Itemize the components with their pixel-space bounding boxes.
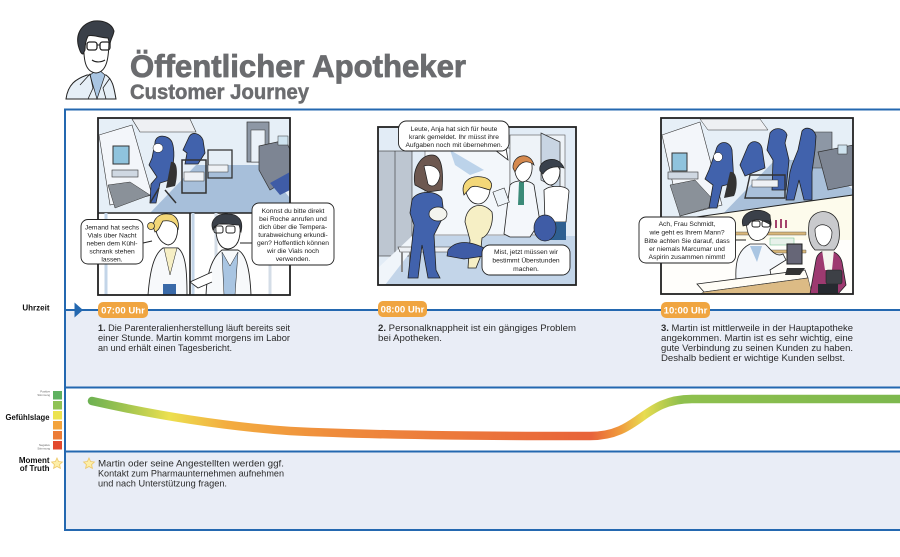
comic panel 2 (378, 121, 576, 285)
panel: journey frame (65, 110, 900, 530)
moment of truth label: of Truth (20, 464, 50, 473)
text block: step 2: 2. Personalknappheit ist ein gängiges Problem (378, 323, 574, 334)
speech bubble: bestimmt Überstunden (492, 256, 560, 264)
time badge 07:00 (98, 302, 148, 318)
speech bubble: Aspirin zusammen nimmt! (649, 254, 726, 261)
speech bubble (398, 121, 509, 160)
speech bubble: er niemals Marcumar und (649, 246, 725, 253)
speech bubble: Ach, Frau Schmidt, (659, 221, 716, 228)
speech bubble: krank gemeldet. Ihr müsst ihre (409, 134, 499, 141)
speech bubble: neben dem Kühl- (87, 240, 137, 248)
speech bubble: Mist, jetzt müssen wir (494, 249, 559, 256)
moment of truth label: Moment (19, 456, 50, 465)
speech bubble: Leute, Anja hat sich für heute (411, 126, 498, 133)
comic panel 1 (81, 118, 334, 295)
speech bubble (240, 203, 334, 265)
speech bubble: Konnst du bitte direkt (262, 208, 325, 215)
speech bubble: lassen. (101, 256, 123, 264)
text block: step 3: 3. Martin ist mittlerweile in der Hauptapotheke (661, 323, 854, 334)
title: Öffentlicher Apotheker (130, 48, 466, 84)
timeline label: Uhrzeit (22, 304, 50, 312)
speech bubble: turabweichung erkundi- (258, 232, 328, 239)
speech bubble: schrank stehen (89, 248, 135, 256)
comic panel 3 (639, 118, 853, 294)
subtitle: Customer Journey (130, 81, 309, 104)
arrow: timeline start (74, 302, 83, 318)
legend: mood scale: Negative (39, 443, 50, 447)
line chart: mood curve (92, 399, 900, 436)
legend: mood scale: Positive (40, 390, 50, 394)
speech bubble (81, 220, 152, 264)
speech bubble (639, 217, 746, 263)
text block: moment of truth: und nach Unterstützung fragen. (98, 478, 227, 490)
time badge 10:00 (661, 302, 710, 318)
legend: mood scale: Stimmung (37, 393, 50, 397)
speech bubble: Jemand hat sechs (85, 224, 140, 232)
text block: moment of truth: Martin oder seine Angestellten werden ggf. (98, 458, 284, 470)
legend: mood scale: Stimmung (37, 446, 50, 450)
text block: moment of truth: Kontakt zum Pharmaunternehmen aufnehmen (98, 468, 284, 480)
speech bubble: gen? Hoffentlich können (257, 240, 329, 247)
speech bubble: dich über die Tempera- (259, 224, 327, 231)
speech bubble: bei Roche anrufen und (259, 216, 327, 223)
text block: step 2: bei Apotheken. (378, 333, 442, 344)
time badge 08:00: 08:00 Uhr (381, 304, 425, 316)
speech bubble: wie geht es Ihrem Mann? (648, 230, 725, 236)
text block: step 3: gute Verbindung zu seinen Kunden zu haben. (661, 343, 853, 354)
time badge 08:00 (378, 301, 427, 317)
text block: step 3: Deshalb bedient er wichtige Kunden selbst. (661, 353, 845, 364)
speech bubble: Aufgaben noch mit übernehmen. (405, 142, 503, 149)
icon: pharmacist portrait (66, 21, 116, 99)
text block: step 1: an und erhält einen Tagesbericht. (98, 343, 232, 354)
text block: step 1: einer Stunde. Martin kommt morgens im Labor (98, 333, 290, 344)
mood label: Gefühlslage (6, 413, 50, 422)
icon: star (52, 458, 62, 468)
speech bubble (482, 245, 570, 275)
time badge 07:00: 07:00 Uhr (101, 306, 145, 316)
speech bubble: machen. (513, 266, 539, 273)
speech bubble: verwenden. (276, 256, 310, 263)
text block: step 1: 1. Die Parenteralienherstellung läuft bereits seit (98, 323, 297, 334)
speech bubble: Bitte achten Sie darauf, dass (644, 238, 730, 245)
speech bubble: wir die Vials noch (266, 248, 319, 255)
speech bubble: Vials über Nacht (88, 232, 137, 240)
icon: star (84, 458, 94, 468)
legend: mood scale (37, 390, 62, 450)
text block: step 3: angekommen. Martin ist es sehr wichtig, eine (661, 333, 853, 344)
time badge 10:00: 10:00 Uhr (664, 306, 708, 316)
